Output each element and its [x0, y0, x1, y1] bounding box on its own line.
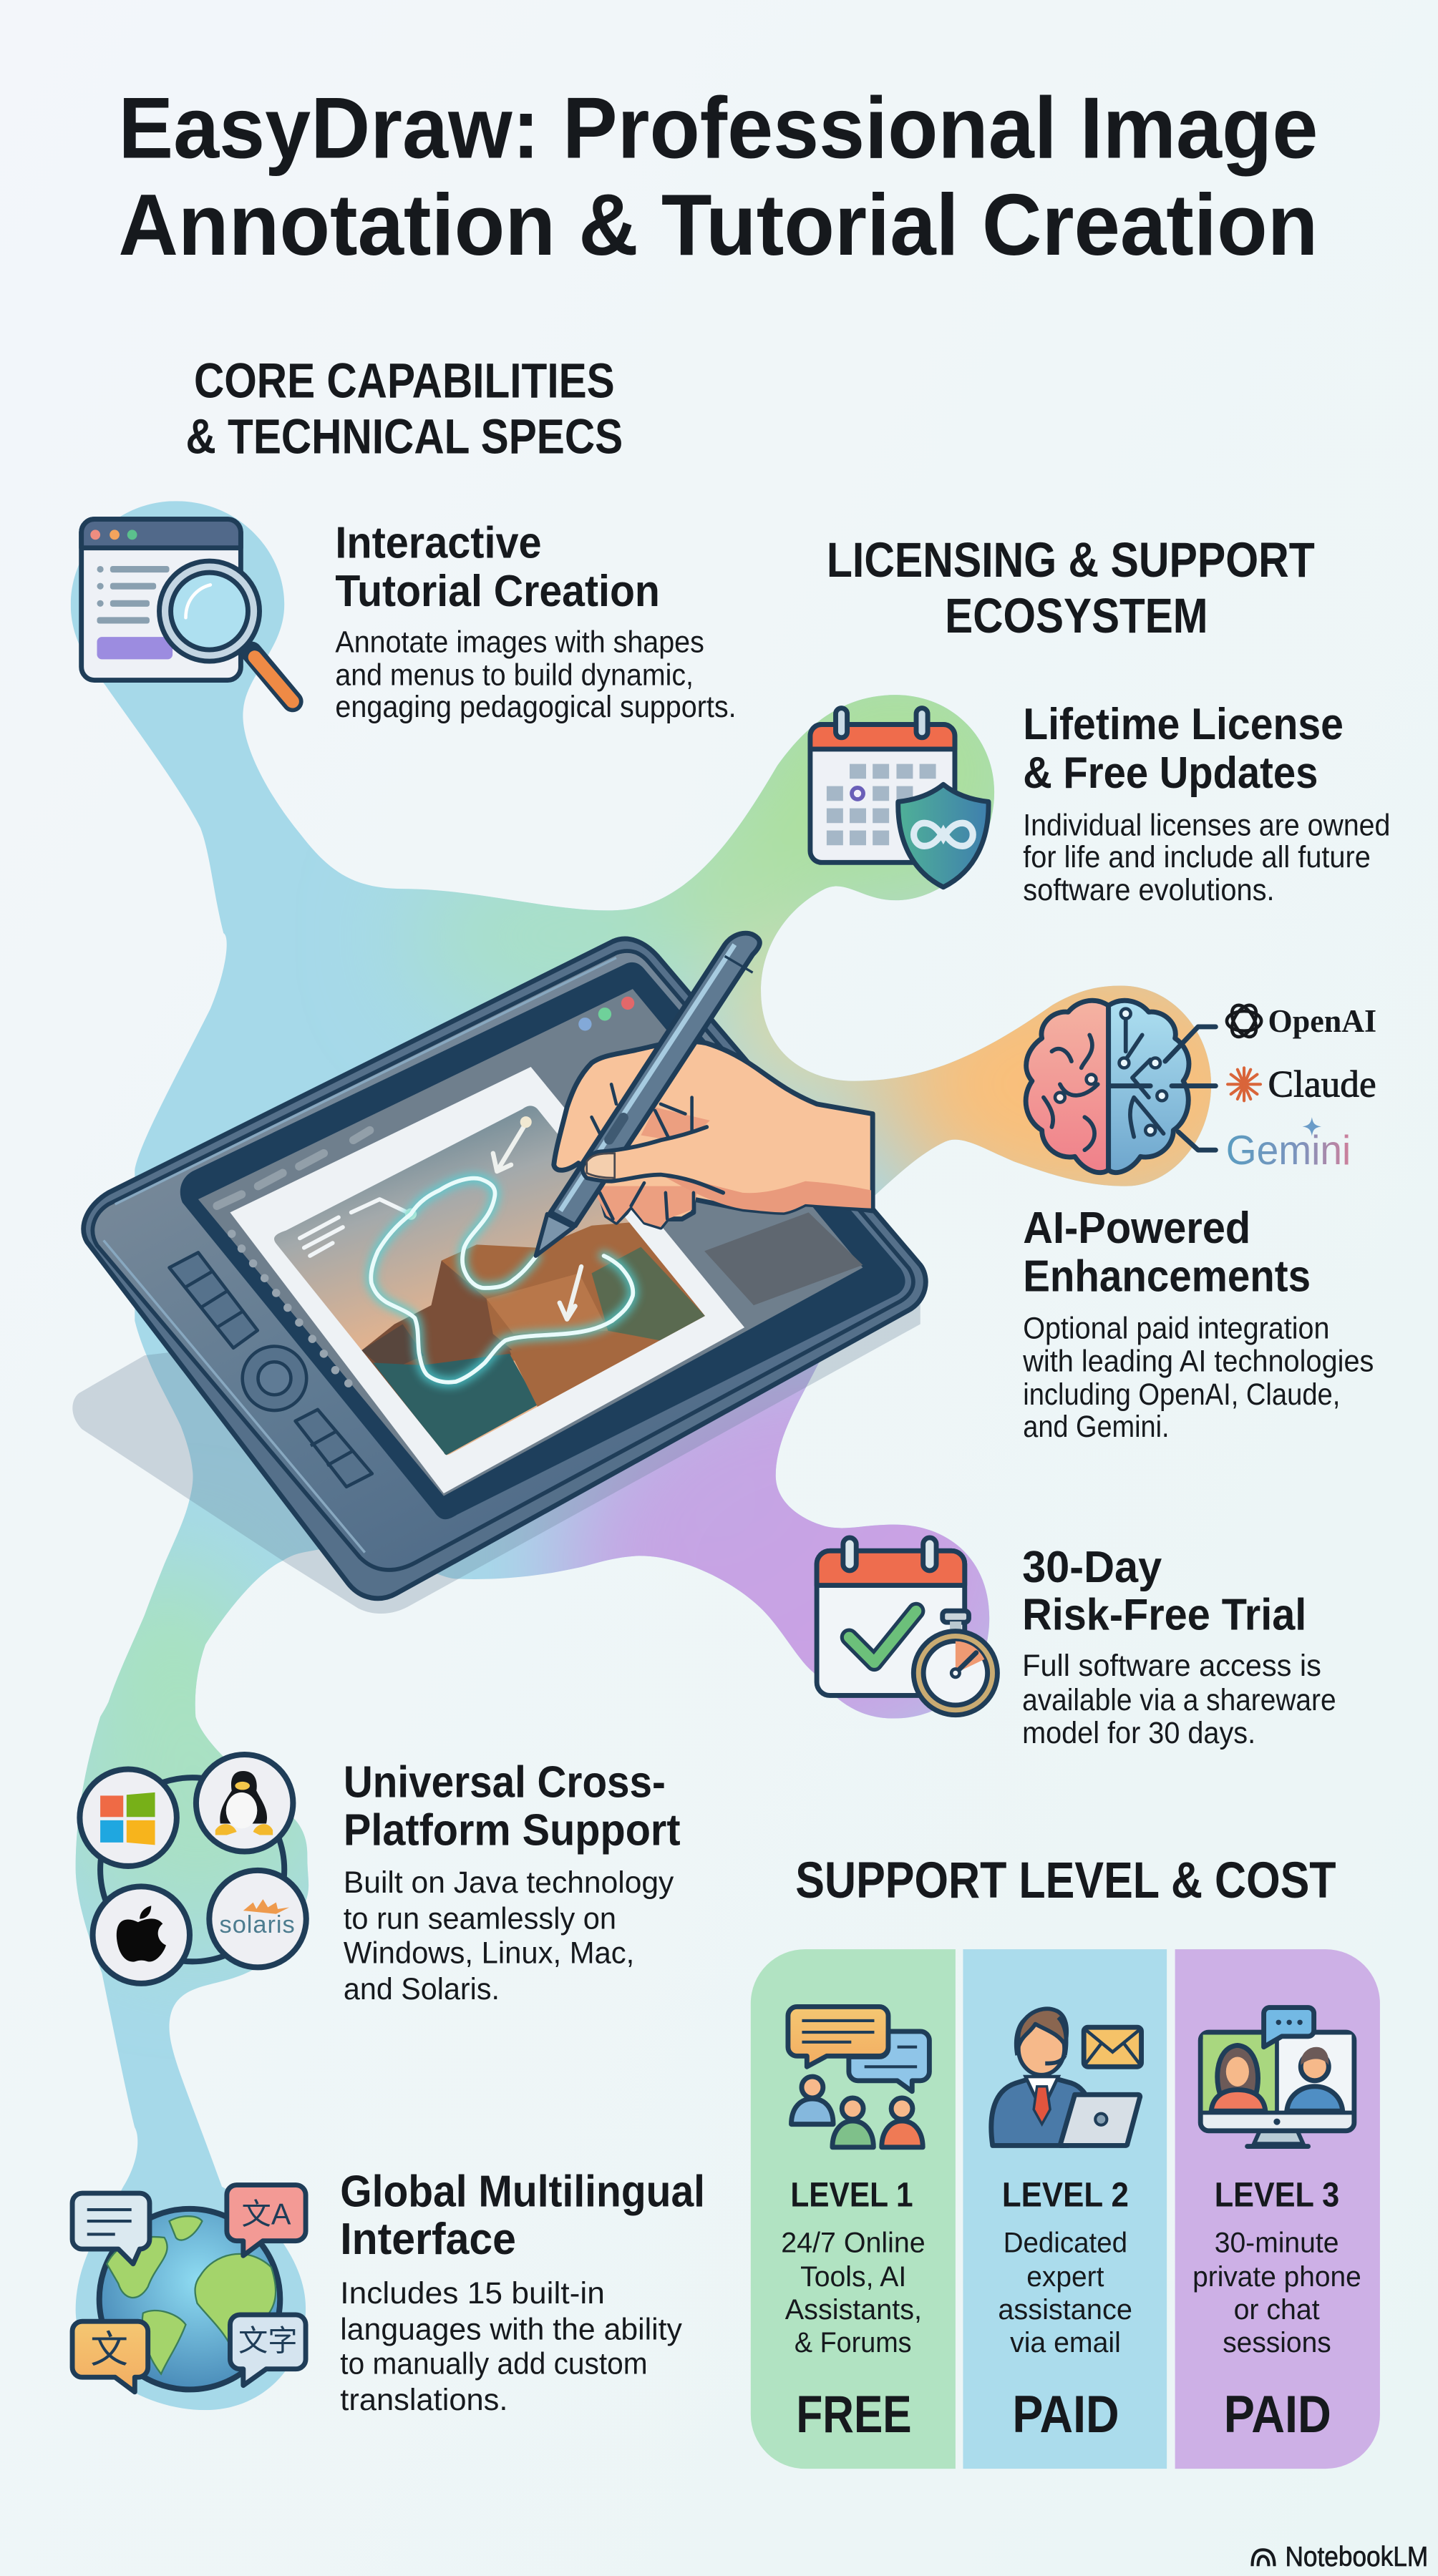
- feature: multilingual interface: [340, 2167, 705, 2416]
- panel: level 3: private phone: [1192, 2260, 1361, 2293]
- feature: interactive tutorial creation: Interactive: [335, 518, 542, 567]
- panel: level 1: LEVEL 1: [790, 2175, 913, 2214]
- side panel: [704, 1212, 863, 1305]
- feature: multilingual interface: translations.: [340, 2383, 507, 2416]
- heading: core capabilities: & TECHNICAL SPECS: [185, 409, 623, 464]
- feature: cross-platform: [344, 1758, 681, 2006]
- title: EasyDraw: Professional Image: [118, 79, 1318, 176]
- feature: interactive tutorial creation: [335, 518, 737, 723]
- panel: level 3: PAID: [1224, 2384, 1331, 2444]
- feature: lifetime license: Individual licenses are owned: [1023, 808, 1390, 841]
- icon: community forum: [788, 2006, 929, 2147]
- panel: level 3: LEVEL 3: [1215, 2175, 1339, 2214]
- callout lines: [300, 1199, 411, 1256]
- Solaris: solaris: [220, 1911, 295, 1938]
- icon: calendar with infinity shield: [810, 708, 988, 887]
- panel: level 2: [963, 1949, 1167, 2469]
- feature: 30-day trial: [1022, 1543, 1336, 1750]
- feature: cross-platform: and Solaris.: [344, 1972, 500, 2006]
- icon: AI brain: [1026, 1000, 1215, 1173]
- feature: multilingual interface: Includes 15 built-in: [340, 2276, 605, 2310]
- feature: interactive tutorial creation: Annotate images with shapes: [335, 625, 704, 658]
- feature: 30-day trial: available via a shareware: [1022, 1683, 1336, 1717]
- panel: level 1: Tools, AI: [800, 2260, 906, 2293]
- landscape photo: [274, 1106, 705, 1455]
- bubble: CJK characters: 文字: [238, 2324, 298, 2357]
- title: [118, 79, 1318, 273]
- panel: level 2: assistance: [998, 2293, 1132, 2326]
- screen bezel: [180, 962, 905, 1519]
- feature: AI-powered enhancements: AI-Powered: [1023, 1204, 1250, 1253]
- icon: 30-day calendar with stopwatch: [817, 1538, 997, 1715]
- feature: AI-powered enhancements: Optional paid integration: [1023, 1311, 1329, 1345]
- title: Annotation & Tutorial Creation: [118, 176, 1318, 273]
- hand palm and fingers: [554, 1041, 873, 1227]
- feature: interactive tutorial creation: engaging pedagogical supports.: [335, 690, 737, 723]
- logo: Gemini: Gemini: [1226, 1128, 1351, 1174]
- panel: level 3: [1175, 1949, 1380, 2469]
- tool dots: [228, 1229, 353, 1387]
- finger shading: [592, 1107, 710, 1227]
- bubble: translate: [227, 2185, 306, 2255]
- gradient ribbon connecting all features: [70, 501, 1211, 2410]
- heading: core capabilities: [185, 353, 623, 464]
- wrist shading: [661, 1175, 871, 1212]
- thumb: [583, 1127, 743, 1193]
- tablet cast shadow: [72, 1289, 920, 1614]
- feature: cross-platform: Windows, Linux, Mac,: [344, 1936, 634, 1970]
- feature: lifetime license: software evolutions.: [1023, 873, 1275, 907]
- panel: level 1: & Forums: [795, 2326, 912, 2358]
- feature: multilingual interface: languages with the ability: [340, 2312, 683, 2346]
- tablet top face: [92, 951, 913, 1570]
- feature: cross-platform: Platform Support: [344, 1805, 681, 1855]
- feature: 30-day trial: Risk-Free Trial: [1022, 1591, 1306, 1640]
- feature: lifetime license: & Free Updates: [1023, 748, 1318, 798]
- Linux: [196, 1755, 293, 1852]
- tablet shell: [84, 939, 926, 1599]
- feature: interactive tutorial creation: Tutorial Creation: [335, 567, 660, 616]
- feature: lifetime license: for life and include all future: [1023, 840, 1371, 874]
- toolbar pills: [217, 1131, 370, 1206]
- panel: level 1: FREE: [796, 2384, 912, 2444]
- feature: AI-powered enhancements: including OpenAI, Claude,: [1023, 1377, 1340, 1411]
- bubble: orange character: 文: [90, 2329, 128, 2371]
- feature: 30-day trial: 30-Day: [1022, 1543, 1162, 1592]
- panel: level 3: 30-minute: [1215, 2227, 1339, 2259]
- icon: support agent: [991, 2009, 1142, 2145]
- panel: level 1: Assistants,: [785, 2293, 922, 2326]
- white canvas: [230, 1067, 744, 1493]
- Apple: [93, 1886, 190, 1984]
- panel: level 3: sessions: [1223, 2326, 1331, 2358]
- icon: window with magnifier: [82, 519, 293, 701]
- hand creases: [592, 1084, 694, 1219]
- Windows: [79, 1769, 177, 1866]
- bubble: orange character: [72, 2321, 148, 2392]
- pen: [536, 933, 759, 1256]
- feature: multilingual interface: Interface: [340, 2215, 516, 2264]
- bubble: lines: [72, 2193, 150, 2264]
- panel: level 2: via email: [1010, 2326, 1121, 2358]
- panel: level 1: [751, 1949, 956, 2469]
- feature: 30-day trial: Full software access is: [1022, 1649, 1321, 1682]
- feature: lifetime license: [1023, 700, 1390, 907]
- feature: multilingual interface: Global Multilingual: [340, 2167, 705, 2216]
- panel: level 2: LEVEL 2: [1002, 2175, 1129, 2214]
- panel: level 3: or chat: [1234, 2293, 1320, 2326]
- icon: globe with language bubbles: [72, 2185, 306, 2392]
- window dots: [578, 1018, 592, 1030]
- bubble: CJK characters: [230, 2315, 306, 2386]
- feature: cross-platform: Universal Cross-: [344, 1758, 666, 1807]
- tablet buttons: [170, 1252, 372, 1487]
- feature: lifetime license: Lifetime License: [1023, 700, 1344, 749]
- Solaris: [209, 1870, 306, 1967]
- icon: operating systems: [79, 1755, 306, 1984]
- feature: AI-powered enhancements: with leading AI technologies: [1022, 1345, 1374, 1378]
- panel: level 2: Dedicated: [1004, 2227, 1127, 2259]
- screen UI: [198, 989, 863, 1496]
- logo: Claude: Claude: [1268, 1063, 1376, 1105]
- heading: core capabilities: CORE CAPABILITIES: [194, 353, 615, 409]
- logo: OpenAI: [1227, 1001, 1376, 1041]
- feature: cross-platform: to run seamlessly on: [344, 1901, 616, 1935]
- feature: interactive tutorial creation: and menus to build dynamic,: [335, 658, 694, 691]
- glowing annotation stroke: [371, 1179, 633, 1382]
- heading: support level and cost: SUPPORT LEVEL & COST: [795, 1853, 1336, 1909]
- feature: AI-powered enhancements: [1022, 1204, 1374, 1443]
- heading: licensing and support: ECOSYSTEM: [945, 588, 1208, 643]
- annotation arrows: [493, 1123, 581, 1319]
- heading: licensing and support: [827, 532, 1315, 643]
- feature: AI-powered enhancements: and Gemini.: [1023, 1410, 1170, 1443]
- panel: level 2: expert: [1026, 2260, 1104, 2293]
- heading: licensing and support: LICENSING & SUPPORT: [827, 532, 1315, 587]
- feature: multilingual interface: to manually add custom: [340, 2347, 648, 2381]
- logo: OpenAI: OpenAI: [1268, 1002, 1376, 1039]
- bubble: translate: 文A: [242, 2198, 291, 2231]
- feature: AI-powered enhancements: Enhancements: [1023, 1252, 1311, 1302]
- icon: video call monitor: [1200, 2008, 1354, 2147]
- feature: 30-day trial: model for 30 days.: [1022, 1716, 1255, 1750]
- face highlight: [104, 958, 616, 1553]
- tablet with hand and pen: [72, 933, 926, 1614]
- panel: level 1: 24/7 Online: [781, 2227, 926, 2259]
- feature: cross-platform: Built on Java technology: [344, 1865, 674, 1899]
- panel: level 2: PAID: [1012, 2384, 1119, 2444]
